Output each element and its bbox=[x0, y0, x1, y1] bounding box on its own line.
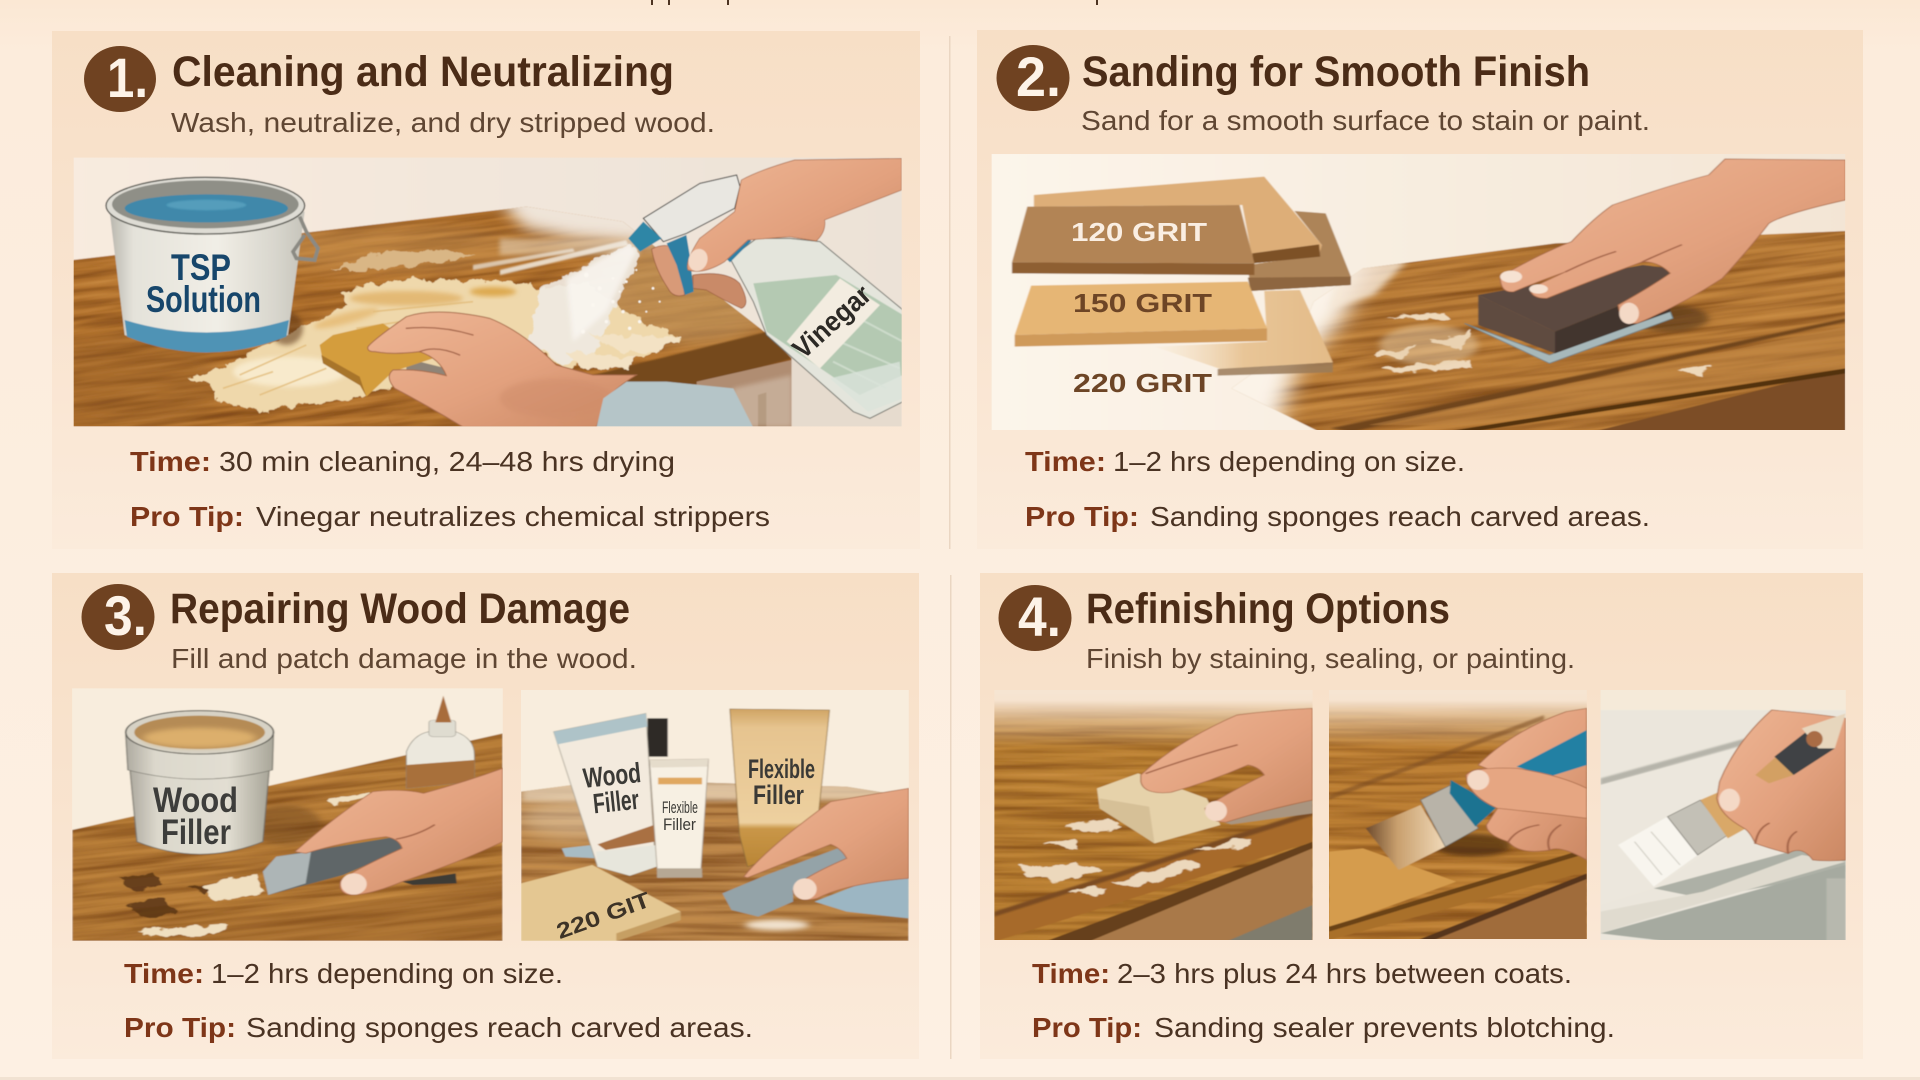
pro tip note: Sanding sponges reach carved areas. bbox=[1150, 501, 1650, 532]
step number badge 4: 4. bbox=[1018, 585, 1061, 648]
painting hand bbox=[1717, 710, 1846, 861]
bucket label: Solution bbox=[146, 279, 261, 320]
trigger sprayer bbox=[643, 175, 740, 242]
pro tip note: Sanding sealer prevents blotching. bbox=[1154, 1012, 1615, 1043]
sanding dust bbox=[1374, 312, 1709, 377]
small flexible filler tube bbox=[650, 759, 708, 878]
cloth under block bbox=[1220, 800, 1313, 824]
time note: Time: bbox=[1025, 446, 1106, 477]
step number badge 2: 2. bbox=[1016, 45, 1061, 108]
time note: Time: bbox=[1032, 958, 1110, 989]
time note: Time: bbox=[130, 446, 211, 477]
glue bottle bbox=[406, 732, 474, 788]
time note: 30 min cleaning, 24–48 hrs drying bbox=[219, 446, 675, 477]
heading: Repairing Wood Damage bbox=[170, 585, 630, 633]
upper hand bbox=[687, 158, 902, 271]
right hand bbox=[744, 788, 909, 900]
sleeve bbox=[597, 382, 753, 427]
pro tip note: Pro Tip: bbox=[1032, 1012, 1142, 1043]
black tube bbox=[647, 718, 668, 757]
step number badge 3: 3. bbox=[104, 584, 147, 647]
heading: Refinishing Options bbox=[1086, 585, 1450, 633]
time note: 2–3 hrs plus 24 hrs between coats. bbox=[1117, 958, 1572, 989]
sandpaper label: 220 GIT bbox=[553, 887, 654, 944]
painting scene bbox=[1599, 685, 1848, 943]
wood filler tube bbox=[554, 713, 657, 876]
subheading: Sand for a smooth surface to stain or paint. bbox=[1081, 105, 1650, 136]
left hand bbox=[295, 768, 503, 895]
grit labels: 120 GRIT bbox=[1071, 217, 1207, 247]
foam bbox=[188, 278, 680, 412]
pro tip note: Pro Tip: bbox=[130, 501, 244, 532]
grit labels: 150 GRIT bbox=[1073, 288, 1212, 318]
scrubbing sponge bbox=[406, 362, 446, 376]
sanding block bbox=[1464, 312, 1673, 363]
putty knife bbox=[402, 873, 457, 885]
tube labels: Wood bbox=[582, 757, 642, 794]
time note: 1–2 hrs depending on size. bbox=[1113, 446, 1465, 477]
bottle bbox=[730, 238, 903, 418]
sanding block bbox=[1097, 773, 1220, 843]
left scene bbox=[0, 614, 700, 1051]
sandpaper stack bbox=[1034, 177, 1322, 263]
subheading: Wash, neutralize, and dry stripped wood. bbox=[171, 107, 715, 138]
illustration: sanding, staining and painting wood bbox=[990, 685, 1848, 943]
bucket bbox=[270, 312, 303, 345]
step number badge 4 bbox=[998, 585, 1072, 651]
filler can bbox=[130, 770, 269, 854]
white scuff bbox=[745, 920, 809, 930]
step number badge 1: 1. bbox=[107, 46, 148, 109]
grit labels bbox=[1071, 217, 1212, 398]
right scene bbox=[445, 685, 981, 985]
clipped line of intro text at top edge bbox=[651, 0, 1098, 5]
bucket label: TSP bbox=[171, 247, 231, 288]
sanding hand bbox=[1141, 708, 1313, 822]
pro tip note: Sanding sponges reach carved areas. bbox=[246, 1012, 753, 1043]
panel background bbox=[977, 30, 1863, 549]
can label: Filler bbox=[161, 813, 231, 852]
lower fingers bbox=[652, 245, 685, 296]
debris and powder bbox=[118, 873, 204, 917]
illustration: TSP bucket, sponge and vinegar spray on wood bbox=[74, 158, 902, 426]
can label: Wood bbox=[153, 781, 238, 820]
stain brush bbox=[1366, 805, 1445, 870]
staining hand bbox=[1466, 708, 1587, 860]
panel: step 3 repairing wood damage bbox=[0, 573, 981, 1059]
time note: Time: bbox=[124, 958, 204, 989]
illustration: wood filler can, putty knife and filler tubes bbox=[0, 614, 981, 1051]
scrubbing hand bbox=[368, 312, 636, 427]
panel: step 1 cleaning and neutralizing bbox=[52, 31, 920, 532]
heading: Sanding for Smooth Finish bbox=[1082, 48, 1590, 96]
sanding scene bbox=[990, 685, 1319, 943]
tube labels: Filler bbox=[753, 780, 804, 810]
sanding hand bbox=[1500, 159, 1846, 323]
panel: step 4 refinishing options bbox=[980, 573, 1863, 1059]
illustration: sandpaper grits and sanding block on wood bbox=[992, 154, 1846, 430]
tube labels bbox=[582, 754, 815, 834]
time note: 1–2 hrs depending on size. bbox=[211, 958, 563, 989]
can label bbox=[153, 781, 238, 852]
tube labels: Flexible bbox=[748, 754, 815, 784]
grit labels: 220 GRIT bbox=[1073, 368, 1212, 398]
paint brush bbox=[1618, 817, 1698, 887]
spill streak bbox=[333, 250, 476, 270]
tube labels: Filler bbox=[592, 784, 641, 819]
panel background bbox=[52, 573, 919, 1059]
step number badge 3 bbox=[82, 584, 154, 650]
spray fan bbox=[530, 243, 640, 365]
step number badge 1 bbox=[84, 46, 156, 112]
panel: step 2 sanding for smooth finish bbox=[977, 30, 1920, 549]
panel background bbox=[52, 31, 920, 549]
bucket label bbox=[146, 247, 261, 320]
pro tip note: Pro Tip: bbox=[124, 1012, 236, 1043]
subheading: Finish by staining, sealing, or painting. bbox=[1086, 643, 1575, 674]
pro tip note: Vinegar neutralizes chemical strippers bbox=[256, 501, 770, 532]
sandpaper block bbox=[521, 865, 681, 941]
large flexible filler tube bbox=[730, 709, 830, 867]
hand shadow bbox=[1632, 305, 1709, 332]
tube labels: Flexible bbox=[662, 798, 698, 817]
tube labels: Filler bbox=[663, 815, 696, 834]
blue cloth bbox=[815, 877, 909, 918]
pro tip note: Pro Tip: bbox=[1025, 501, 1139, 532]
panel background bbox=[980, 573, 1863, 1059]
subheading: Fill and patch damage in the wood. bbox=[171, 643, 637, 674]
staining scene bbox=[1325, 685, 1593, 943]
bottle label: Vinegar bbox=[786, 279, 877, 365]
step number badge 2 bbox=[996, 45, 1070, 111]
scraper bbox=[722, 845, 852, 917]
heading: Cleaning and Neutralizing bbox=[172, 48, 674, 96]
